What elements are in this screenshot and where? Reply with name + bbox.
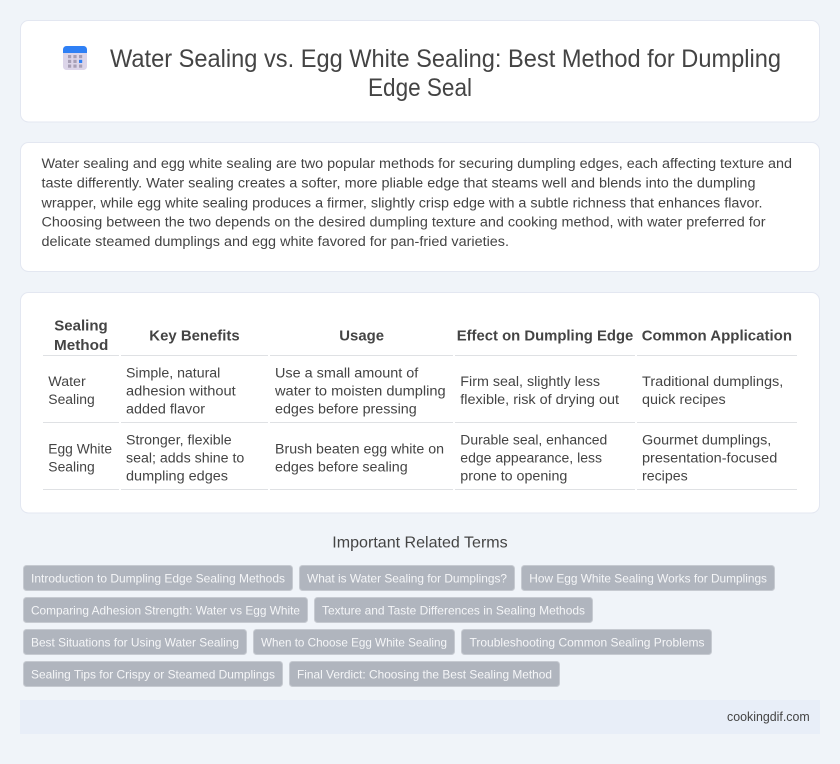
table row: water sealing: edges before pressing — [275, 401, 417, 417]
table row: water sealing: Firm seal, slightly less — [460, 374, 600, 390]
table row: water sealing — [48, 365, 783, 417]
text block: introduction paragraph: taste differently. Water sealing creates a softer, more pliable edge that steams well and blends into the dumpling — [42, 176, 756, 192]
table row: water sealing: Simple, natural — [126, 365, 220, 381]
table row: water sealing: added flavor — [126, 401, 205, 417]
table row: egg white sealing: Gourmet dumplings, — [642, 432, 771, 448]
table row: egg white sealing: recipes — [642, 468, 688, 484]
table header row: Usage — [339, 328, 384, 345]
footer: cookingdif.com — [727, 709, 810, 724]
related term tags: What is Water Sealing for Dumplings? — [307, 571, 507, 585]
table row: egg white sealing: Durable seal, enhanced — [460, 432, 607, 448]
table row: egg white sealing: dumpling edges — [126, 468, 228, 484]
related term tags: Best Situations for Using Water Sealing — [31, 635, 239, 649]
related term tags: Introduction to Dumpling Edge Sealing Methods — [31, 571, 285, 585]
heading: important related terms: Important Related Terms — [332, 535, 508, 552]
related term tags: How Egg White Sealing Works for Dumplings — [529, 571, 767, 585]
text block: introduction paragraph: Choosing between the two depends on the desired dumpling texture and cooking method, with water preferred for — [42, 214, 766, 230]
table row: water sealing: Sealing — [48, 392, 95, 408]
table row: water sealing: adhesion without — [126, 383, 236, 399]
title: Water Sealing vs. Egg White Sealing: Best Method for Dumpling — [110, 46, 781, 73]
table header row: Key Benefits — [149, 328, 240, 345]
text block: introduction paragraph: wrapper, while egg white sealing produces a firmer, slightly crisp edge with a subtle richness that enhances flavor. — [40, 196, 762, 212]
text block: introduction paragraph: Water sealing and egg white sealing are two popular methods for securing dumpling edges, each affecting texture and — [42, 156, 792, 172]
text block: introduction paragraph: delicate steamed dumplings and egg white favored for pan-fried varieties. — [42, 234, 509, 250]
table row: egg white sealing: Sealing — [48, 459, 95, 475]
table row: egg white sealing: edge appearance, less — [460, 450, 602, 466]
text block: introduction paragraph — [40, 156, 792, 250]
table header row: Common Application — [642, 328, 792, 345]
related term tags: Sealing Tips for Crispy or Steamed Dumplings — [31, 667, 275, 681]
table row: water sealing: flexible, risk of drying out — [460, 392, 619, 408]
table row: egg white sealing: presentation-focused — [642, 450, 777, 466]
related term tags: Troubleshooting Common Sealing Problems — [470, 635, 704, 649]
related term tags: When to Choose Egg White Sealing — [261, 635, 447, 649]
related term tags: Comparing Adhesion Strength: Water vs Egg White — [31, 603, 300, 617]
table row: egg white sealing: Brush beaten egg white on — [275, 441, 444, 457]
panel: header — [20, 20, 820, 122]
table header row: Effect on Dumpling Edge — [457, 328, 633, 345]
related term tags — [24, 566, 774, 686]
table header row — [54, 318, 792, 354]
table row: water sealing: Use a small amount of — [275, 365, 418, 381]
table row: water sealing: quick recipes — [642, 392, 726, 408]
table row: water sealing: water to moisten dumpling — [274, 383, 446, 399]
table header row: Sealing — [54, 318, 108, 335]
related term tags: Texture and Taste Differences in Sealing Methods — [322, 603, 585, 617]
table row: water sealing: Traditional dumplings, — [642, 374, 783, 390]
table row: water sealing: Water — [48, 374, 86, 390]
table row: egg white sealing — [48, 432, 777, 484]
related term tags: Final Verdict: Choosing the Best Sealing Method — [297, 667, 552, 681]
title: Edge Seal — [368, 75, 472, 102]
table header row: Method — [54, 337, 108, 354]
icon: calendar — [63, 46, 87, 70]
table row: egg white sealing: prone to opening — [460, 468, 567, 484]
panel: comparison table — [20, 292, 820, 513]
table row: egg white sealing: edges before sealing — [275, 459, 408, 475]
table row: egg white sealing: Stronger, flexible — [126, 432, 232, 448]
footer — [20, 700, 820, 734]
title — [110, 46, 781, 102]
table row: egg white sealing: Egg White — [48, 441, 112, 457]
table row: egg white sealing: seal; adds shine to — [126, 450, 244, 466]
panel: introduction — [20, 142, 820, 272]
